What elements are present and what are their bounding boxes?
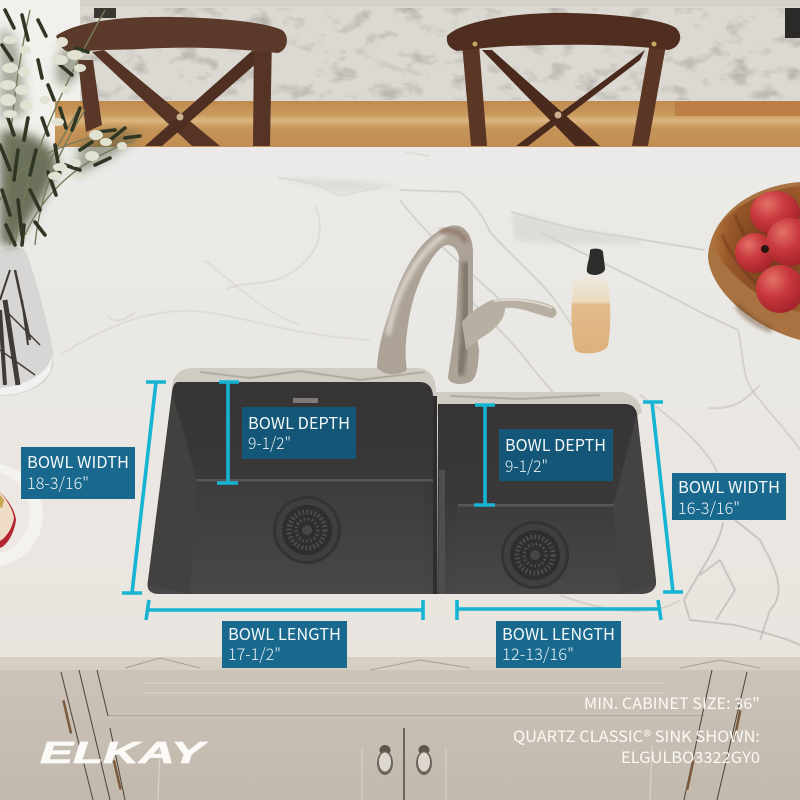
callout: left bowl depth: 9-1/2" — [248, 430, 291, 454]
sink — [148, 368, 656, 594]
callout: left bowl depth: BOWL DEPTH — [248, 410, 350, 434]
sink deck rim — [172, 368, 642, 416]
chair: left — [56, 17, 287, 146]
callout: right bowl length: BOWL LENGTH — [502, 621, 615, 645]
faucet — [377, 225, 556, 384]
text: sink model shown: QUARTZ CLASSIC® SINK SHOWN: — [513, 725, 760, 747]
callout: left bowl length — [222, 621, 347, 668]
plant foliage — [0, 10, 140, 245]
text: sink model shown — [513, 725, 760, 768]
marble countertop — [0, 147, 800, 670]
fruit bowl — [708, 182, 800, 340]
dimension line: left bowl width — [122, 382, 166, 593]
callout: left bowl width: BOWL WIDTH — [27, 449, 129, 473]
dimension line: left bowl depth — [217, 382, 239, 483]
icon: cabinet knobs — [377, 745, 432, 775]
plate with apple slice — [0, 463, 43, 567]
chair: right — [447, 13, 680, 146]
sink drain: right — [501, 521, 569, 589]
cabinet — [0, 670, 800, 800]
glass vase with stems — [0, 247, 54, 396]
dark foliage mass — [0, 30, 138, 245]
callout: right bowl width — [672, 473, 786, 520]
dimension line: right bowl depth — [474, 405, 495, 505]
callout: left bowl width — [21, 447, 135, 499]
callout: right bowl width: BOWL WIDTH — [678, 474, 780, 498]
left bowl — [148, 382, 436, 594]
apples — [735, 191, 800, 313]
callout: right bowl width: 16-3/16" — [678, 495, 740, 519]
text: sink model shown: ELGULBO3322GY0 — [621, 746, 760, 768]
text: minimum cabinet size: MIN. CABINET SIZE: 36" — [584, 692, 760, 714]
sink drain: left — [273, 496, 341, 564]
callout: left bowl length: BOWL LENGTH — [228, 621, 341, 645]
dimension line: right bowl length — [457, 600, 661, 620]
callout: right bowl length — [496, 621, 621, 668]
callout: right bowl length: 12-13/16" — [502, 641, 574, 665]
callout: right bowl depth: BOWL DEPTH — [505, 432, 606, 456]
right bowl — [433, 396, 656, 594]
counter edge — [0, 657, 800, 670]
callout: right bowl depth: 9-1/2" — [505, 453, 548, 477]
dimension line: left bowl length — [146, 600, 423, 620]
room background — [0, 0, 800, 147]
callout: left bowl depth — [242, 407, 356, 459]
callout: right bowl depth — [499, 429, 613, 481]
callout: left bowl width: 18-3/16" — [27, 470, 89, 494]
callout: left bowl length: 17-1/2" — [228, 641, 281, 665]
soap dispenser — [572, 249, 610, 353]
dimension line: right bowl width — [643, 402, 683, 592]
logo: Elkay: ELKAY — [40, 735, 209, 770]
